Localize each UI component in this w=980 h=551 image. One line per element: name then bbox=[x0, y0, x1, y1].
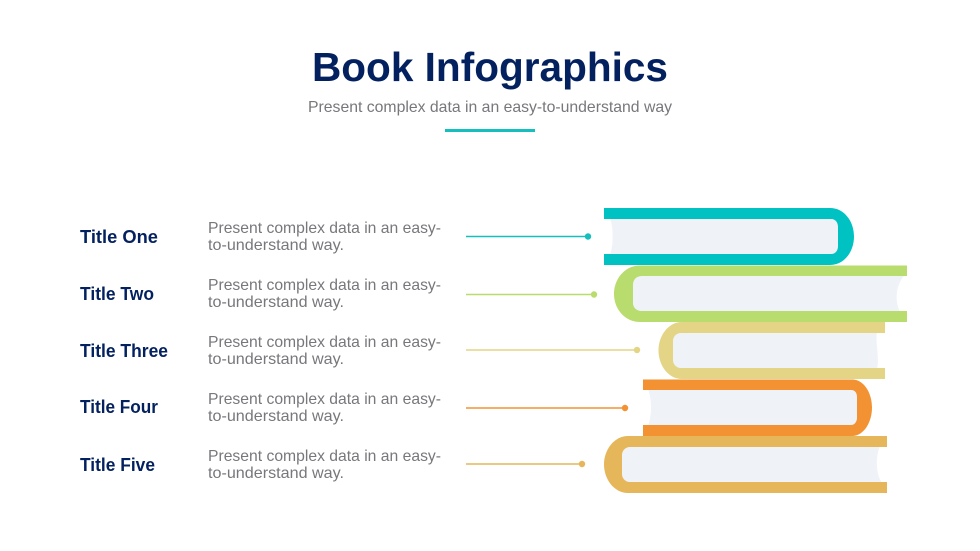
description: title five: to-understand way. bbox=[208, 465, 344, 482]
title: Book Infographics bbox=[312, 44, 668, 90]
book: pale yellow bbox=[658, 322, 885, 379]
description: title two: Present complex data in an easy- bbox=[208, 277, 441, 294]
connector: title four bbox=[466, 405, 628, 411]
title underline bbox=[445, 129, 535, 132]
heading: title four: Title Four bbox=[80, 396, 158, 417]
description: title four: Present complex data in an easy- bbox=[208, 391, 441, 408]
connector: title three bbox=[466, 347, 640, 353]
description: title one: to-understand way. bbox=[208, 237, 344, 254]
book: green bbox=[614, 266, 907, 322]
row: title five bbox=[80, 448, 585, 482]
icon: stack of books bbox=[604, 208, 907, 493]
description: title three: to-understand way. bbox=[208, 351, 344, 368]
connector: title five bbox=[466, 461, 585, 467]
connector: title one bbox=[466, 233, 591, 240]
book: orange bbox=[643, 380, 872, 436]
row: title two bbox=[80, 277, 597, 311]
book: gold bbox=[604, 436, 887, 493]
description: title five: Present complex data in an easy- bbox=[208, 448, 441, 465]
description: title two: to-understand way. bbox=[208, 294, 344, 311]
description: title one: Present complex data in an easy- bbox=[208, 220, 441, 237]
heading: title one: Title One bbox=[80, 226, 158, 247]
description: title four: to-understand way. bbox=[208, 408, 344, 425]
heading: title three: Title Three bbox=[80, 340, 168, 361]
row: title three bbox=[80, 334, 640, 368]
description: title three: Present complex data in an easy- bbox=[208, 334, 441, 351]
row: title one bbox=[80, 220, 591, 254]
connector: title two bbox=[466, 291, 597, 298]
subtitle: Present complex data in an easy-to-understand way bbox=[308, 99, 672, 116]
row: title four bbox=[80, 391, 628, 425]
heading: title five: Title Five bbox=[80, 454, 155, 475]
heading: title two: Title Two bbox=[80, 283, 154, 304]
book: teal bbox=[604, 208, 854, 265]
